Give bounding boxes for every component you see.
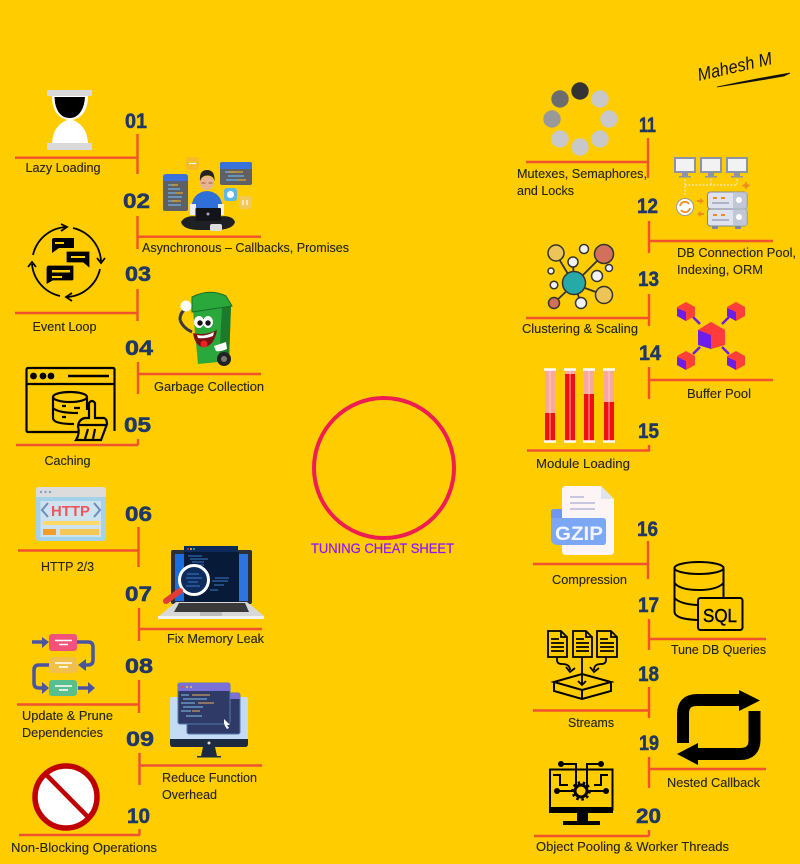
number 05: 05 xyxy=(124,414,151,437)
item 12: DB Connection Pool xyxy=(637,158,796,277)
connector xyxy=(649,221,773,253)
title: TUNING CHEAT SHEET xyxy=(311,540,454,556)
number 17: 17 xyxy=(638,594,659,617)
icon: cluster network xyxy=(548,244,614,308)
item 13: Clustering & Scaling xyxy=(522,244,659,336)
label: Mutexes, Semaphores, xyxy=(517,166,647,181)
item 19: Nested Callback xyxy=(639,690,766,790)
item 04: Garbage Collection xyxy=(125,292,264,394)
item 06: HTTP 2/3 xyxy=(18,487,152,574)
connector xyxy=(526,138,648,178)
connector xyxy=(533,541,648,579)
number 07: 07 xyxy=(125,583,152,606)
label: Event Loop xyxy=(32,319,96,334)
item 10: Non-Blocking Operations xyxy=(11,766,157,855)
icon: SQL database xyxy=(674,562,742,630)
item 09: Reduce Function Overhead xyxy=(126,683,262,802)
icon: documents into tray xyxy=(548,631,617,699)
label: Streams xyxy=(568,715,614,730)
icon: no-entry sign xyxy=(35,766,97,828)
number 01: 01 xyxy=(125,110,147,133)
icon: loop arrows xyxy=(677,690,760,765)
label: Garbage Collection xyxy=(154,379,264,394)
number 11: 11 xyxy=(639,114,656,137)
label: Buffer Pool xyxy=(687,386,751,401)
connector xyxy=(533,687,649,718)
item 14: Buffer Pool xyxy=(639,302,773,401)
connector xyxy=(649,367,773,399)
number 20: 20 xyxy=(636,805,661,828)
central circle xyxy=(314,398,454,538)
item 17: Tune DB Queries xyxy=(638,562,766,657)
icon: monitors and server xyxy=(675,158,750,229)
connector xyxy=(15,289,138,321)
connector xyxy=(16,439,138,445)
item 20: Object Pooling & Worker Threads xyxy=(534,761,729,854)
item 11: Mutexes, Semaphores, and Locks xyxy=(517,82,656,198)
connector xyxy=(527,445,650,451)
label line 2: and Locks xyxy=(517,183,574,198)
label: Compression xyxy=(552,572,627,587)
item 07: Fix Memory Leak xyxy=(125,546,264,646)
icon: dependency flow xyxy=(32,634,95,696)
number 12: 12 xyxy=(637,195,658,218)
number 15: 15 xyxy=(638,420,659,443)
icon: green bin mascot xyxy=(180,292,232,366)
icon: programmer with code panels xyxy=(163,157,252,231)
connector xyxy=(140,753,262,785)
label line 2: Indexing, ORM xyxy=(677,262,763,277)
number 13: 13 xyxy=(638,268,659,291)
icon: laptop with magnifier xyxy=(158,546,264,619)
label: Non-Blocking Operations xyxy=(11,840,157,855)
number 10: 10 xyxy=(127,805,150,828)
label: Lazy Loading xyxy=(26,160,100,175)
SQL text: SQL xyxy=(703,606,737,626)
connector xyxy=(19,829,140,835)
number 04: 04 xyxy=(125,337,153,360)
connector xyxy=(526,294,649,326)
connector xyxy=(18,527,138,567)
label: Nested Callback xyxy=(667,775,760,790)
icon: connected cubes xyxy=(677,302,745,370)
label: Caching xyxy=(44,453,90,468)
icon: loading spinner xyxy=(543,82,618,156)
item 05: Caching xyxy=(16,368,151,468)
icon: monitor with gear circuit xyxy=(549,761,613,825)
connector xyxy=(649,619,766,650)
connector xyxy=(139,608,262,641)
icon: loading bars xyxy=(544,370,615,442)
number 09: 09 xyxy=(126,728,154,751)
label: Fix Memory Leak xyxy=(167,631,264,646)
label: HTTP 2/3 xyxy=(41,559,94,574)
label: Clustering & Scaling xyxy=(522,321,638,336)
number 08: 08 xyxy=(125,655,153,678)
label: Module Loading xyxy=(536,456,630,471)
signature: Mahesh M xyxy=(695,48,774,85)
item 02: Asynchronous xyxy=(123,157,349,255)
connector xyxy=(534,830,649,836)
number 18: 18 xyxy=(638,663,659,686)
label: DB Connection Pool, xyxy=(677,245,796,260)
connector xyxy=(138,216,261,249)
number 03: 03 xyxy=(125,263,151,286)
number 14: 14 xyxy=(639,342,661,365)
icon: hourglass xyxy=(47,90,92,150)
item 01: Lazy Loading xyxy=(15,90,147,175)
item 18: Streams xyxy=(533,631,659,730)
connector xyxy=(138,362,261,394)
icon: monitor with code windows xyxy=(170,683,248,758)
label: Asynchronous – Callbacks, Promises xyxy=(142,240,349,255)
icon: event loop bubbles xyxy=(28,224,105,301)
item 16: Compression xyxy=(533,486,658,587)
label line 2: Dependencies xyxy=(22,725,103,740)
connector xyxy=(649,757,766,788)
icon: GZIP file: GZIP xyxy=(555,524,603,545)
number 16: 16 xyxy=(637,518,658,541)
connector xyxy=(15,134,138,174)
label: Tune DB Queries xyxy=(671,642,766,657)
label: Reduce Function xyxy=(162,770,257,785)
item 15: Module Loading xyxy=(527,370,659,471)
connector xyxy=(17,680,139,713)
number 06: 06 xyxy=(125,503,152,526)
item 03: Event Loop xyxy=(15,224,151,334)
label: Object Pooling & Worker Threads xyxy=(536,839,729,854)
icon: window with database and broom xyxy=(26,368,114,440)
label: Update & Prune xyxy=(22,708,113,723)
icon: HTTP browser window: HTTP xyxy=(51,503,90,520)
label line 2: Overhead xyxy=(162,787,217,802)
number 19: 19 xyxy=(639,732,659,755)
item 08: Update & Prune Dependencies xyxy=(17,634,153,740)
number 02: 02 xyxy=(123,190,150,213)
